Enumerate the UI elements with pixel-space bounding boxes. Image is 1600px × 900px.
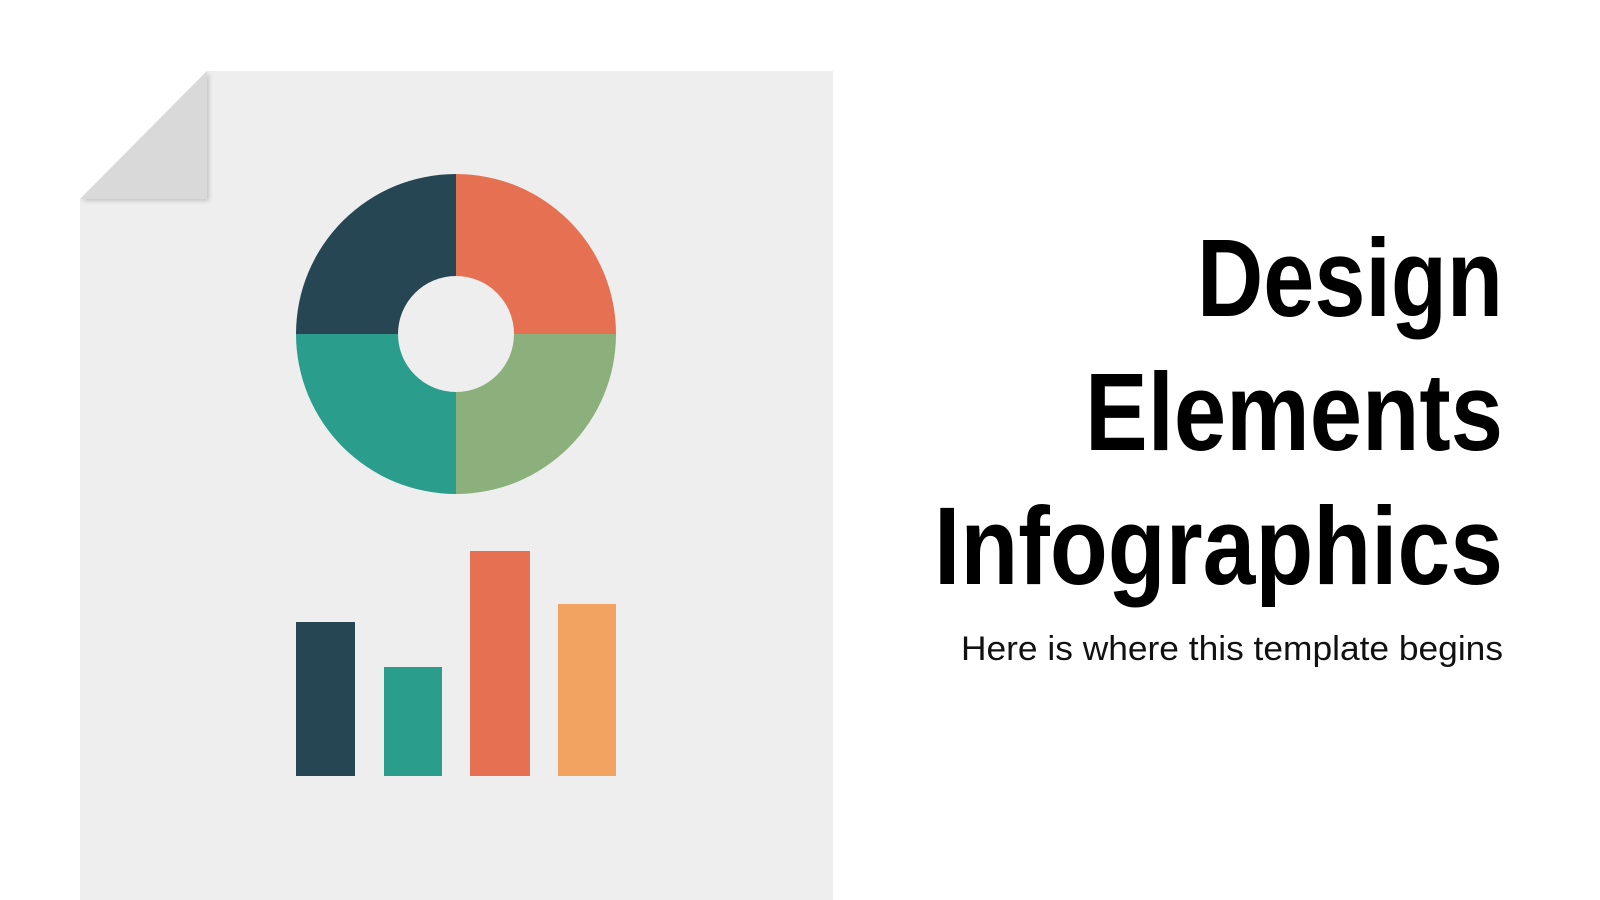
subtitle: Here is where this template begins <box>961 630 1503 668</box>
donut chart <box>296 174 616 494</box>
title <box>934 217 1503 608</box>
bar chart <box>296 551 616 776</box>
icon: folded corner <box>80 71 207 199</box>
